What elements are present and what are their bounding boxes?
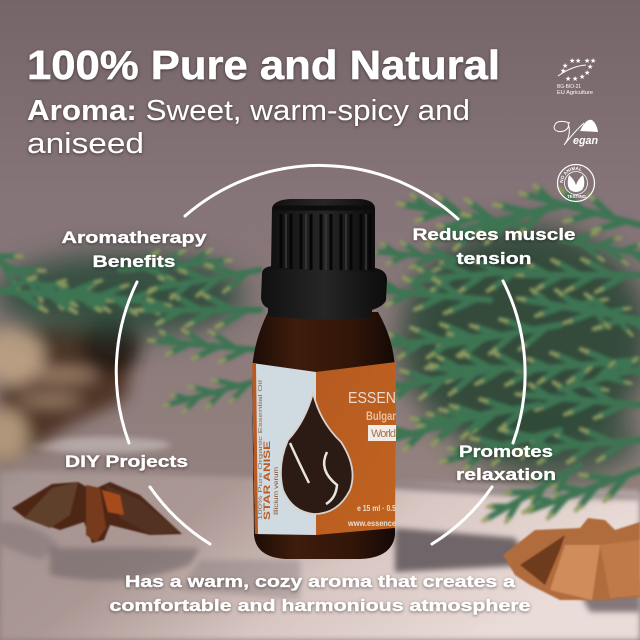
background table surface bbox=[0, 470, 640, 640]
label brand: e 15 ml · 0.5 bbox=[357, 504, 396, 513]
label: aromatherapy benefits: Aromatherapy bbox=[62, 228, 207, 247]
icon: EU organic leaf bbox=[557, 57, 596, 96]
icon: EU organic leaf: BG-BIO-21 bbox=[557, 84, 581, 90]
label: aromatherapy benefits: Benefits bbox=[92, 252, 176, 271]
bottle glass bbox=[252, 312, 395, 559]
subtitle bbox=[27, 95, 470, 160]
star anise right bbox=[503, 518, 640, 600]
icon: EU organic leaf: ★ bbox=[572, 75, 578, 83]
bottle cap ribbed top bbox=[271, 199, 375, 272]
label brand bbox=[347, 390, 396, 528]
label: aromatherapy benefits bbox=[62, 228, 207, 271]
bottle cap collar bbox=[261, 266, 387, 320]
subtitle: Aroma: Sweet, warm-spicy and bbox=[27, 95, 470, 127]
label: reduces muscle tension: Reduces muscle bbox=[412, 225, 576, 244]
icon: EU organic leaf: ★ bbox=[575, 57, 581, 65]
label: DIY projects: DIY Projects bbox=[65, 452, 188, 471]
icon: no animal testing: TESTING bbox=[567, 194, 587, 199]
subtitle: aniseed bbox=[27, 128, 144, 160]
burlap sack bbox=[0, 315, 140, 470]
star anise left bbox=[12, 482, 182, 543]
icon: EU organic leaf: ★ bbox=[584, 57, 590, 65]
label side text: Illicium verum bbox=[273, 467, 280, 515]
icon: no animal testing: NO ANIMAL bbox=[560, 166, 582, 183]
table shadow bands bbox=[0, 480, 640, 612]
icon: no animal testing bbox=[556, 164, 596, 202]
bottom caption: Has a warm, cozy aroma that creates a bbox=[125, 573, 516, 591]
label: reduces muscle tension bbox=[412, 225, 576, 268]
label swirls bbox=[290, 443, 337, 504]
icon: EU organic leaf: EU Agriculture bbox=[557, 90, 593, 96]
label side text: 100% Pure Organic Essential Oil bbox=[258, 380, 264, 520]
dark foliage shadow mass bbox=[0, 225, 640, 480]
label brand: World bbox=[371, 428, 396, 440]
icon: EU organic leaf: ★ bbox=[584, 69, 590, 77]
label: promotes relaxation bbox=[456, 442, 556, 484]
foliage sprigs bbox=[0, 177, 640, 534]
label: promotes relaxation: relaxation bbox=[456, 465, 556, 484]
label brand: www.essence bbox=[347, 519, 396, 528]
icon: vegan bbox=[554, 120, 598, 147]
light floor band bbox=[30, 437, 170, 453]
label bbox=[252, 362, 396, 535]
label brand: Bulgar bbox=[366, 409, 396, 423]
bottom caption: comfortable and harmonious atmosphere bbox=[110, 597, 530, 615]
label: promotes relaxation: Promotes bbox=[459, 442, 553, 461]
label drop icon bbox=[281, 393, 353, 514]
icon: EU organic leaf: ★ bbox=[587, 63, 593, 71]
label side text bbox=[258, 380, 280, 520]
dropper bottle bbox=[252, 199, 396, 559]
icon: EU organic leaf: ★ bbox=[569, 57, 575, 65]
label side text: STAR ANISE bbox=[262, 441, 273, 520]
icon: vegan: egan bbox=[573, 135, 598, 147]
title: 100% Pure and Natural bbox=[27, 42, 500, 88]
label brand: ESSEN bbox=[348, 390, 396, 407]
icon: EU organic leaf: ★ bbox=[579, 73, 585, 81]
icon: EU organic leaf: ★ bbox=[560, 67, 566, 75]
icon: EU organic leaf: ★ bbox=[565, 75, 571, 83]
circular arc segments bbox=[116, 165, 525, 544]
icon: EU organic leaf: ★ bbox=[590, 57, 596, 65]
bottom caption bbox=[110, 573, 530, 615]
background wall bbox=[0, 0, 640, 490]
label: reduces muscle tension: tension bbox=[456, 249, 532, 268]
icon: EU organic leaf: ★ bbox=[562, 62, 568, 70]
